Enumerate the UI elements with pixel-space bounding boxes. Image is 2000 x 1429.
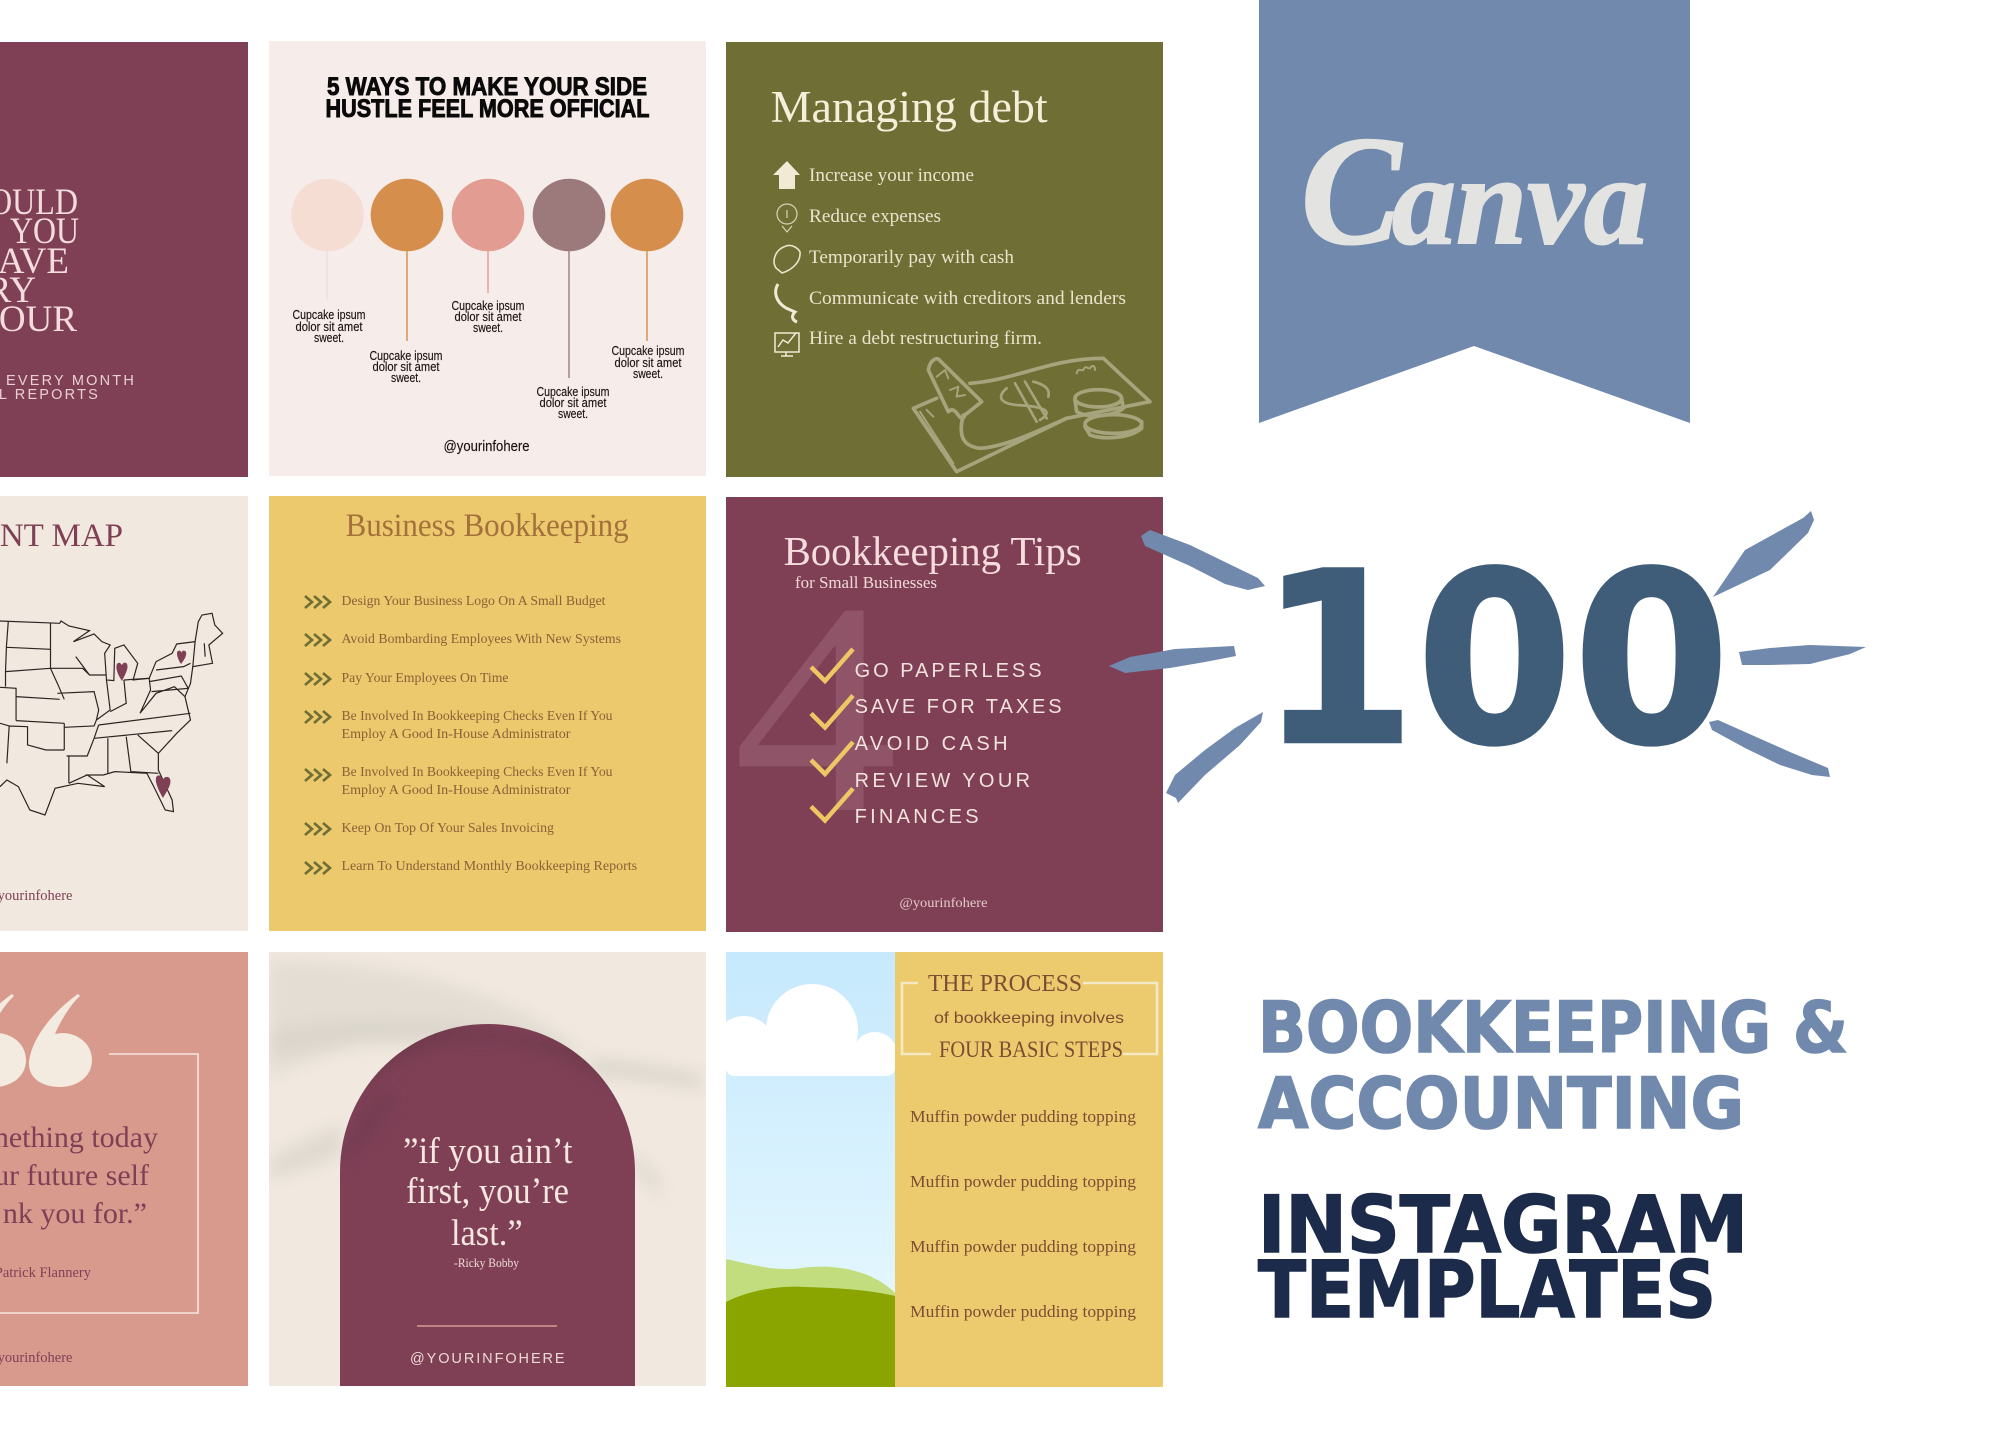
tips list: AVOID CASH (855, 733, 1008, 755)
timeline labels: dolor sit amet (454, 310, 522, 324)
process steps: Muffin powder pudding topping (910, 1237, 1137, 1256)
big number 100: 100 (1259, 522, 1730, 799)
quote text: last.” (451, 1213, 523, 1254)
feather shadow (269, 960, 702, 1198)
quote text fragment: nk you for.” (3, 1197, 147, 1230)
headline fragment: YOU (10, 211, 79, 252)
process heading: FOUR BASIC STEPS (939, 1037, 1123, 1062)
icon: telephone (776, 284, 797, 322)
headline: bookkeeping and accounting: ACCOUNTING (1258, 1063, 1744, 1145)
panel: client map (0, 496, 248, 931)
subtext fragment (0, 373, 136, 403)
timeline labels: sweet. (314, 331, 344, 345)
headline: instagram templates: TEMPLATES (1258, 1246, 1716, 1336)
timeline labels: sweet. (633, 367, 663, 381)
panel: the process (714, 952, 1163, 1387)
icon: map hearts (116, 651, 186, 798)
bookkeeping list (342, 594, 637, 874)
icon: yellow checkmarks (811, 649, 853, 820)
handle: @yourinfohere (900, 896, 988, 911)
author: -Ricky Bobby (454, 1256, 520, 1270)
timeline labels: sweet. (391, 371, 421, 385)
sky illustration (714, 952, 897, 1387)
icon: coin balloon (777, 204, 797, 232)
watermark number: 4 (733, 540, 898, 876)
quote text (403, 1131, 573, 1254)
timeline labels (292, 299, 684, 421)
quote text fragment (0, 1121, 158, 1230)
subtext fragment: L REPORTS (0, 387, 100, 403)
process frame (902, 983, 1157, 1054)
tips list: GO PAPERLESS (855, 660, 1042, 682)
handle: @YOURINFOHERE (410, 1351, 565, 1367)
panel: arch quote (269, 952, 706, 1386)
timeline labels: Cupcake ipsum (370, 349, 442, 363)
icon: quotation marks (0, 994, 92, 1087)
arch shading (340, 1024, 614, 1158)
hills (726, 1259, 895, 1302)
title: HUSTLE FEEL MORE OFFICIAL (326, 95, 650, 123)
title: Bookkeeping Tips (784, 528, 1082, 574)
process steps: Muffin powder pudding topping (910, 1302, 1137, 1321)
panel: quote on pink (0, 952, 248, 1386)
debt tips list: Increase your income (809, 165, 974, 186)
timeline labels: Cupcake ipsum (612, 344, 684, 358)
title fragment: NT MAP (0, 518, 123, 554)
panel: bookkeeping tips (726, 497, 1163, 932)
bookkeeping list: Keep On Top Of Your Sales Invoicing (342, 821, 554, 836)
icon: income arrow (773, 161, 800, 189)
title: Business Bookkeeping (346, 508, 629, 544)
timeline labels: sweet. (558, 407, 588, 421)
timeline labels: dolor sit amet (540, 396, 607, 410)
arch shape (340, 1024, 635, 1386)
quote text: ”if you ain’t (403, 1131, 573, 1172)
title (326, 73, 650, 123)
logo wordmark: C (1301, 104, 1403, 277)
debt tips list: Communicate with creditors and lenders (809, 288, 1126, 309)
process heading: THE PROCESS (928, 971, 1082, 997)
timeline labels: dolor sit amet (296, 320, 363, 334)
process steps: Muffin powder pudding topping (910, 1172, 1137, 1191)
headline: instagram templates (1258, 1181, 1748, 1336)
icon: piggy bank (774, 245, 800, 273)
illustration: money and coins sketch (913, 358, 1150, 472)
icon: cloud (714, 984, 897, 1076)
bookkeeping list: Employ A Good In-House Administrator (342, 783, 571, 798)
quote text: first, you’re (406, 1171, 569, 1212)
handle: @yourinfohere (444, 439, 530, 455)
debt tips list: Reduce expenses (809, 206, 941, 227)
timeline labels: Cupcake ipsum (292, 308, 366, 322)
bookkeeping list: Learn To Understand Monthly Bookkeeping Reports (342, 859, 637, 874)
headline: instagram templates: INSTAGRAM (1258, 1181, 1748, 1271)
subtext fragment: EVERY MONTH (6, 373, 136, 389)
bookkeeping list: Be Involved In Bookkeeping Checks Even If You (342, 709, 612, 724)
timeline labels: Cupcake ipsum (536, 385, 610, 399)
quote frame (0, 1054, 198, 1313)
title: 5 WAYS TO MAKE YOUR SIDE (327, 73, 647, 101)
headline: bookkeeping and accounting: BOOKKEEPING & (1258, 987, 1848, 1069)
timeline labels: dolor sit amet (372, 360, 440, 374)
tips list: SAVE FOR TAXES (855, 696, 1062, 718)
process steps: Muffin powder pudding topping (910, 1107, 1137, 1126)
logo wordmark: anva (1392, 132, 1648, 271)
debt tips list (809, 165, 1126, 349)
bookkeeping list: Employ A Good In-House Administrator (342, 727, 571, 742)
banner ribbon (1259, 0, 1690, 423)
bookkeeping list: Design Your Business Logo On A Small Budget (342, 594, 606, 609)
title: Managing debt (771, 82, 1048, 132)
icon: chart monitor (775, 333, 799, 356)
bookkeeping list: Avoid Bombarding Employees With New Systems (342, 632, 621, 647)
timeline labels: Cupcake ipsum (452, 299, 524, 313)
panel: monthly reports template (0, 42, 248, 477)
brush burst strokes (1109, 511, 1866, 803)
icon: triple chevrons (305, 596, 330, 874)
headline fragment (0, 182, 79, 340)
subtitle: for Small Businesses (795, 573, 937, 592)
process heading (928, 971, 1124, 1062)
process steps (910, 1107, 1137, 1321)
process heading: of bookkeeping involves (934, 1010, 1124, 1027)
panel: 5 ways to make your side hustle (269, 41, 706, 476)
headline: bookkeeping and accounting (1258, 987, 1848, 1145)
tips list: REVIEW YOUR (855, 770, 1030, 792)
debt tips list: Hire a debt restructuring firm. (809, 328, 1042, 349)
bookkeeping list: Be Involved In Bookkeeping Checks Even If You (342, 765, 612, 780)
timeline labels: sweet. (473, 321, 503, 335)
bookkeeping list: Pay Your Employees On Time (342, 671, 508, 686)
panel: managing debt (726, 42, 1163, 477)
divider (417, 1325, 557, 1327)
panel: business bookkeeping (269, 496, 706, 931)
tips list (855, 660, 1062, 828)
timeline labels: dolor sit amet (614, 356, 682, 370)
tips list: FINANCES (855, 806, 979, 828)
debt tips list: Temporarily pay with cash (809, 247, 1015, 268)
US map outline (0, 613, 223, 815)
balloon timeline circles (291, 179, 683, 378)
